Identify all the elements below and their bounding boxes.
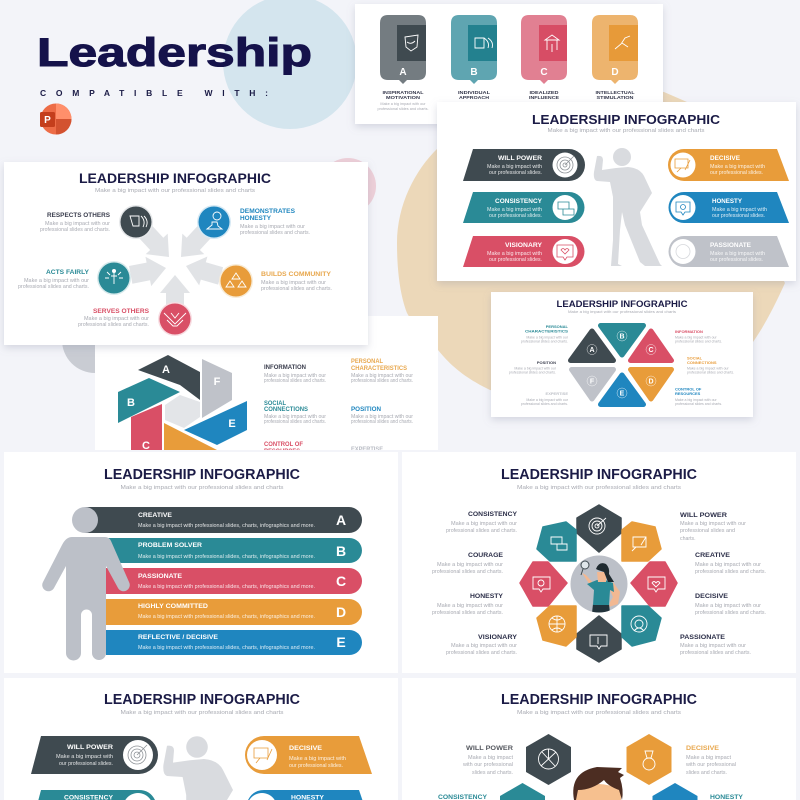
bar B: problem solver: PROBLEM SOLVER xyxy=(138,543,203,549)
panel title: LEADERSHIP INFOGRAPHIC xyxy=(532,112,721,127)
node: serves others: Make a big impact with our xyxy=(84,316,149,322)
triangle letters xyxy=(587,331,656,398)
panel: four shield cards xyxy=(355,4,663,124)
bar C: passionate: C xyxy=(336,573,346,589)
left labels: professional slides and charts. xyxy=(446,650,517,656)
left labels: POSITION xyxy=(537,360,556,365)
panel: hexagon arrows (cropped) xyxy=(95,316,438,456)
left labels: Make a big impact with our xyxy=(451,643,517,649)
banner: decisive: Make a big impact with xyxy=(289,756,346,762)
bar A: creative: Make a big impact with professional slides, charts, infographics and more. xyxy=(138,523,315,529)
right labels: PASSIONATE xyxy=(680,635,725,641)
card C: idealized influence xyxy=(521,15,567,101)
panel: five arrows to centre xyxy=(4,162,368,345)
right labels: professional slides and charts. xyxy=(687,370,734,374)
banner: honesty: Make a big impact with xyxy=(712,207,767,213)
node: demonstrates honesty: professional slides and charts. xyxy=(240,230,310,236)
hexagon segments A to F: B xyxy=(127,397,135,409)
banner: visionary xyxy=(463,236,584,267)
triangle letters: B xyxy=(619,334,625,340)
label: decisive: Make a big impact xyxy=(686,755,732,761)
left labels: professional slides and charts. xyxy=(521,402,568,406)
panel subtitle: Make a big impact with our professional slides and charts xyxy=(548,128,705,134)
banner: will power xyxy=(463,149,585,181)
right labels: professional slides and charts. xyxy=(680,650,751,656)
banner: consistency: Make a big impact with xyxy=(487,207,542,213)
card D: intellectual stimulation: D xyxy=(611,67,619,78)
panel title: LEADERSHIP INFOGRAPHIC xyxy=(104,467,301,483)
triangle letters: A xyxy=(589,347,595,354)
left labels xyxy=(509,324,569,406)
right labels: SOCIAL xyxy=(687,356,703,360)
label: decisive: with our professional xyxy=(686,762,736,768)
left labels: COURAGE xyxy=(468,553,503,559)
bar D: highly committed: D xyxy=(336,604,346,620)
bar D: highly committed xyxy=(106,599,362,625)
card A: inspirational motivation: INSPIRATIONAL xyxy=(382,90,424,96)
text column: information, social connections, control of resources: Make a big impact with our xyxy=(264,373,326,379)
panel title: LEADERSHIP INFOGRAPHIC xyxy=(79,171,271,186)
bar B: problem solver: B xyxy=(336,543,346,559)
banner: consistency xyxy=(38,790,155,800)
main heading: Leadership xyxy=(37,31,312,75)
triangle letters: C xyxy=(648,347,654,354)
banner: consistency: CONSISTENCY xyxy=(495,199,542,205)
bar A: creative xyxy=(85,507,362,533)
node: acts fairly: professional slides and charts. xyxy=(18,284,89,290)
right labels: Make a big impact with our xyxy=(680,521,746,527)
bar A: creative: A xyxy=(336,512,346,528)
panel: hexagons with man (cropped at bottom) xyxy=(402,678,796,800)
panel subtitle: Make a big impact with our professional slides and charts xyxy=(95,188,255,194)
right labels: CREATIVE xyxy=(695,553,730,559)
text column: information, social connections, control of resources: RESOURCES xyxy=(264,449,300,455)
ring of segments xyxy=(520,505,677,662)
left labels: EXPERTISE xyxy=(546,391,568,396)
text column: personal characteristics, position, expertise: professional slides and charts. xyxy=(351,378,413,384)
label: will power: with our professional xyxy=(463,762,513,768)
text column: personal characteristics, position, expertise: Make a big impact with our xyxy=(351,414,413,420)
panel title: LEADERSHIP INFOGRAPHIC xyxy=(501,467,698,483)
node: builds community: Make a big impact with our xyxy=(261,280,326,286)
right labels: Make a big impact with our xyxy=(675,398,717,402)
label: will power: slides and charts. xyxy=(472,770,513,776)
human figure xyxy=(42,507,130,661)
left labels: Make a big impact with our xyxy=(514,366,557,370)
icon: PowerPoint logo xyxy=(40,104,72,134)
card B: individual approach: INDIVIDUAL xyxy=(458,90,490,96)
subheading: compatible with: COMPATIBLE WITH: xyxy=(40,88,268,98)
right labels: professional slides and charts. xyxy=(695,569,766,575)
card B: individual approach: B xyxy=(470,67,478,78)
node: demonstrates honesty: DEMONSTRATES xyxy=(240,209,295,215)
node: respects others: RESPECTS OTHERS xyxy=(47,213,110,219)
panel: banners (cropped at bottom) xyxy=(4,678,398,800)
banner: will power: our professional slides. xyxy=(59,761,113,767)
banner: passionate: PASSIONATE xyxy=(710,243,751,249)
central illustration: woman with magnifier xyxy=(570,556,628,613)
right labels: professional slides and charts. xyxy=(675,340,722,344)
right labels: professional slides and charts. xyxy=(675,402,722,406)
silhouette xyxy=(594,148,662,266)
banner: visionary: VISIONARY xyxy=(505,243,542,249)
panel subtitle: Make a big impact with our professional slides and charts xyxy=(517,710,681,716)
triangle letters: E xyxy=(620,390,625,398)
banner: decisive: our professional slides. xyxy=(289,763,343,769)
left labels: Make a big impact with our xyxy=(526,336,569,340)
banner: consistency: our professional slides. xyxy=(489,213,542,219)
card B: individual approach xyxy=(451,15,497,101)
left labels: HONESTY xyxy=(470,594,503,600)
banner: passionate: our professional slides. xyxy=(710,257,763,263)
left labels: Make a big impact with our xyxy=(437,562,503,568)
text column: personal characteristics, position, expertise: PERSONAL xyxy=(351,359,383,365)
node: demonstrates honesty: Make a big impact with our xyxy=(240,224,305,230)
bar E: reflective / decisive xyxy=(106,630,362,655)
hexagon segments A to F: E xyxy=(228,418,236,430)
text column: personal characteristics, position, expertise: Make a big impact with our xyxy=(351,373,413,379)
right labels: CONNECTIONS xyxy=(687,360,717,365)
card D: intellectual stimulation xyxy=(592,15,638,101)
banner: will power: our professional slides. xyxy=(489,170,542,176)
card A: inspirational motivation: A xyxy=(399,67,407,78)
left labels: PERSONAL xyxy=(546,324,569,329)
hexagon: decisive xyxy=(626,734,672,785)
label: will power: WILL POWER xyxy=(466,746,514,752)
text column: information, social connections, control of resources: SOCIAL xyxy=(264,401,286,407)
left labels: Make a big impact with our xyxy=(451,521,517,527)
card A: inspirational motivation: MOTIVATION xyxy=(386,95,421,101)
banner: decisive: our professional slides. xyxy=(710,170,763,176)
left labels: professional slides and charts. xyxy=(509,370,556,374)
node: respects others: Make a big impact with our xyxy=(45,221,110,227)
banner: honesty xyxy=(248,790,362,800)
right labels: Make a big impact with our xyxy=(680,643,746,649)
node: demonstrates honesty: HONESTY xyxy=(240,216,271,222)
hexagon: will power xyxy=(526,734,571,785)
banner: visionary: Make a big impact with xyxy=(487,251,542,257)
left labels: professional slides and charts. xyxy=(446,528,517,534)
right labels: professional slides and charts. xyxy=(695,610,766,616)
panel title: LEADERSHIP INFOGRAPHIC xyxy=(104,692,301,708)
bar B: problem solver: Make a big impact with professional slides, charts, infographics and more. xyxy=(138,554,315,560)
text column: information, social connections, control of resources: CONNECTIONS xyxy=(264,407,308,413)
banner: consistency xyxy=(463,192,584,223)
banner: will power: Make a big impact with xyxy=(56,754,113,760)
panel subtitle: Make a big impact with our professional slides and charts xyxy=(517,485,681,491)
node: demonstrates honesty xyxy=(197,205,310,239)
left labels: VISIONARY xyxy=(478,635,517,641)
text column: information, social connections, control of resources: professional slides and charts. xyxy=(264,419,326,425)
text column: information, social connections, control of resources: professional slides and charts. xyxy=(264,378,326,384)
text column: information, social connections, control of resources: CONTROL OF xyxy=(264,442,303,448)
right labels xyxy=(675,329,734,406)
banner: decisive xyxy=(245,736,372,774)
banner: will power: Make a big impact with xyxy=(487,164,542,170)
right labels xyxy=(680,513,766,656)
triangle letters: D xyxy=(648,378,654,386)
panel: octagon of shapes xyxy=(402,452,796,673)
silhouette xyxy=(163,736,233,800)
node: acts fairly xyxy=(18,261,131,295)
right labels: professional slides and xyxy=(680,528,735,534)
card C: idealized influence: INFLUENCE xyxy=(529,95,560,101)
bar E: reflective / decisive: REFLECTIVE / DECISIVE xyxy=(138,635,218,641)
left labels xyxy=(432,512,517,656)
text column: information, social connections, control of resources: INFORMATION xyxy=(264,365,306,371)
bar D: highly committed: Make a big impact with professional slides, charts, infographics and more. xyxy=(138,614,315,620)
banner: will power: WILL POWER xyxy=(67,745,114,751)
card A: inspirational motivation xyxy=(377,15,429,111)
banner: decisive: DECISIVE xyxy=(289,746,322,752)
panel title: LEADERSHIP INFOGRAPHIC xyxy=(501,692,698,708)
card D: intellectual stimulation: INTELLECTUAL xyxy=(596,90,635,96)
label: will power xyxy=(463,746,514,776)
banner: honesty xyxy=(668,192,789,223)
card D: intellectual stimulation: STIMULATION xyxy=(596,95,634,101)
right labels: Make a big impact with our xyxy=(695,603,761,609)
triangle letters: F xyxy=(590,378,595,386)
right labels: charts. xyxy=(680,536,696,542)
text column: personal characteristics, position, expertise: professional slides and charts. xyxy=(351,419,413,425)
bar B: problem solver xyxy=(106,538,362,563)
right labels: CONTROL OF xyxy=(675,386,702,392)
node: builds community: BUILDS COMMUNITY xyxy=(261,272,331,278)
right labels: Make a big impact with our xyxy=(675,336,717,340)
text column: personal characteristics, position, expertise: EXPERTISE xyxy=(351,447,383,453)
banner: will power xyxy=(31,736,158,774)
hexagon: consistency xyxy=(500,783,545,800)
label: decisive: DECISIVE xyxy=(686,746,719,752)
bar C: passionate xyxy=(106,568,362,594)
bar E: reflective / decisive: Make a big impact with professional slides, charts, infographics and more. xyxy=(138,645,315,651)
banner: passionate: Make a big impact with xyxy=(710,251,765,257)
node: acts fairly: Make a big impact with our xyxy=(24,278,89,284)
left labels: CHARACTERISTICS xyxy=(525,328,568,334)
hexagon: honesty xyxy=(652,783,698,800)
panel title: LEADERSHIP INFOGRAPHIC xyxy=(556,299,688,310)
banner: decisive xyxy=(668,149,789,181)
decorative background shapes xyxy=(62,0,785,405)
ring icons xyxy=(533,518,665,649)
card C: idealized influence: IDEALIZED xyxy=(530,90,559,96)
right labels: Make a big impact with our xyxy=(695,562,761,568)
card B: individual approach: APPROACH xyxy=(459,95,490,101)
banner: passionate xyxy=(669,236,789,267)
banner: decisive: DECISIVE xyxy=(710,156,740,162)
label: decisive: slides and charts. xyxy=(686,770,727,776)
bar D: highly committed: HIGHLY COMMITTED xyxy=(138,604,209,610)
hexagon segments A to F: A xyxy=(162,364,170,376)
panel: triangle hexagon xyxy=(491,292,753,417)
left labels: Make a big impact with our xyxy=(437,603,503,609)
left labels: professional slides and charts. xyxy=(521,340,568,344)
text column: personal characteristics, position, expertise xyxy=(351,359,413,453)
icon: PowerPoint logo: P xyxy=(44,115,51,126)
banner: honesty: our professional slides. xyxy=(712,213,765,219)
node: acts fairly: ACTS FAIRLY xyxy=(46,270,89,276)
right labels: WILL POWER xyxy=(680,513,728,519)
banner: honesty: HONESTY xyxy=(712,199,742,205)
text column: information, social connections, control of resources xyxy=(264,365,326,455)
right labels: RESOURCES xyxy=(675,391,701,396)
label: decisive xyxy=(686,746,736,776)
panel subtitle: Make a big impact with our professional slides and charts xyxy=(120,485,284,491)
text column: information, social connections, control of resources: Make a big impact with our xyxy=(264,414,326,420)
banner: will power: WILL POWER xyxy=(498,156,543,162)
label: will power: Make a big impact xyxy=(468,755,514,761)
bar C: passionate: Make a big impact with professional slides, charts, infographics and more. xyxy=(138,584,315,590)
left labels: CONSISTENCY xyxy=(468,512,517,518)
left labels: Make a big impact with our xyxy=(526,398,569,402)
illustration: man's head xyxy=(573,767,624,800)
hexagon segments A to F xyxy=(118,355,247,452)
bar C: passionate: PASSIONATE xyxy=(138,574,182,580)
node: builds community: professional slides and charts. xyxy=(261,286,332,292)
node: serves others: SERVES OTHERS xyxy=(93,309,149,315)
right labels: Make a big impact with our xyxy=(687,366,729,370)
panel: human with stacked bars xyxy=(4,452,398,673)
panel subtitle: Make a big impact with our professional slides and charts xyxy=(120,710,284,716)
arrows xyxy=(128,220,225,305)
card A: inspirational motivation: Make a big impact with our xyxy=(380,102,426,106)
node: serves others: professional slides and charts. xyxy=(78,322,149,328)
bar E: reflective / decisive: E xyxy=(336,634,346,650)
node: builds community xyxy=(219,264,332,298)
node: respects others: professional slides and charts. xyxy=(40,227,110,233)
card C: idealized influence: C xyxy=(540,67,548,78)
triangles A to F xyxy=(570,326,672,404)
left labels: professional slides and charts. xyxy=(432,569,503,575)
card A: inspirational motivation: professional slides and charts. xyxy=(377,107,429,111)
banner: visionary: our professional slides. xyxy=(489,257,542,263)
node: serves others xyxy=(78,302,192,336)
hexagon segments A to F: F xyxy=(214,376,221,388)
right labels: DECISIVE xyxy=(695,594,728,600)
bar A: creative: CREATIVE xyxy=(138,513,172,519)
text column: personal characteristics, position, expertise: CHARACTERISTICS xyxy=(351,366,407,372)
hexagon segments A to F: C xyxy=(142,440,150,452)
banner: decisive: Make a big impact with xyxy=(710,164,765,170)
panel: banners with silhouette xyxy=(437,102,796,281)
left labels: professional slides and charts. xyxy=(432,610,503,616)
right labels: INFORMATION xyxy=(675,329,703,334)
panel subtitle: Make a big impact with our professional slides and charts xyxy=(568,310,676,314)
node: respects others xyxy=(40,205,153,239)
text column: personal characteristics, position, expertise: POSITION xyxy=(351,407,381,413)
